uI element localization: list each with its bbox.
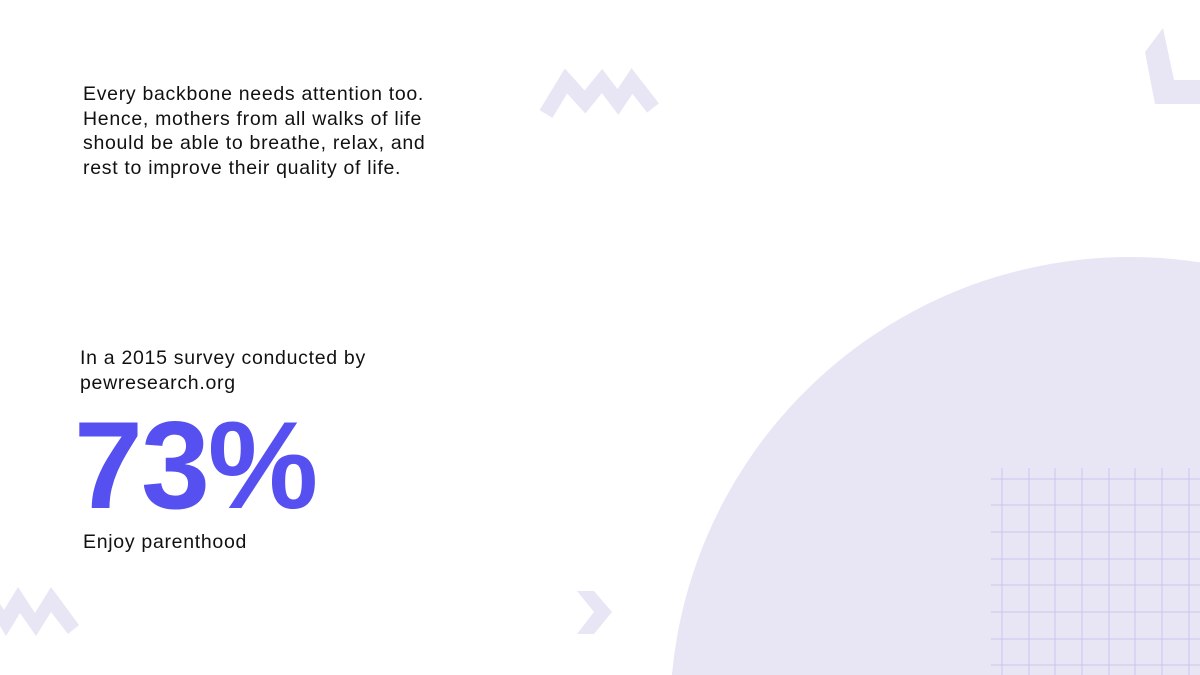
text block: survey source: In a 2015 survey conducted by (80, 347, 366, 369)
stat label: Enjoy parenthood (83, 531, 247, 553)
text block: survey source: pewresearch.org (80, 372, 236, 394)
decor: top zigzag (546, 81, 653, 114)
text block: intro: Hence, mothers from all walks of life (83, 108, 422, 130)
decor: bottom zigzag (0, 587, 79, 636)
text block: intro: Every backbone needs attention too. (83, 83, 424, 105)
text block: intro: rest to improve their quality of life. (83, 156, 401, 178)
decor: large circle (670, 257, 1200, 675)
decor: chevron (577, 591, 612, 634)
text block: intro (83, 83, 425, 178)
text block: intro: should be able to breathe, relax, and (83, 132, 425, 154)
big stat: 73% (74, 397, 316, 535)
decor: bracket (1145, 28, 1200, 104)
decor: grid (991, 468, 1200, 675)
text block: survey source (80, 347, 366, 394)
